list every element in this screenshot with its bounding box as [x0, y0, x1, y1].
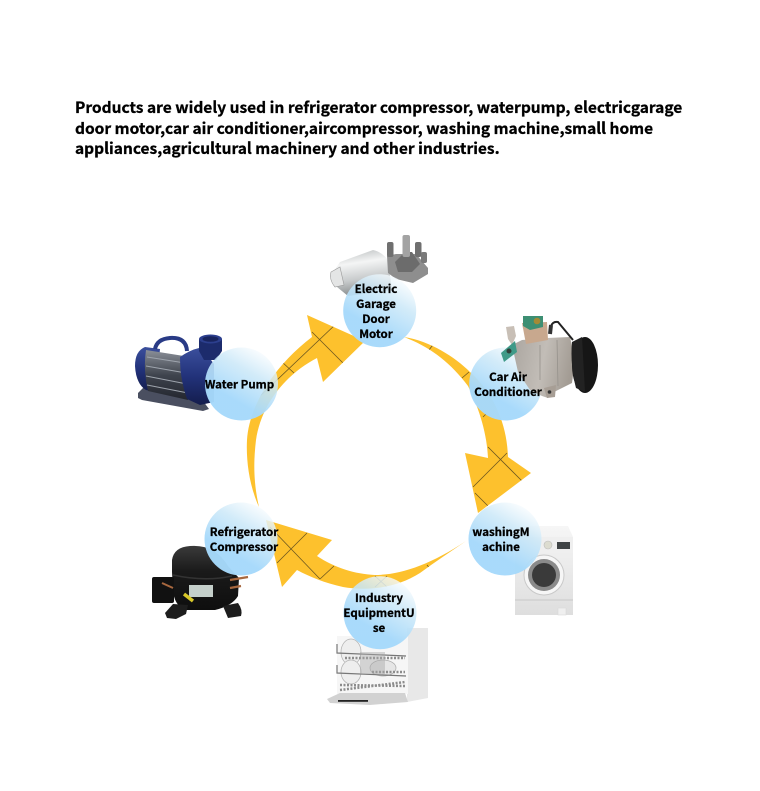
arrow: washing machine to refrigerator compressor — [266, 520, 466, 589]
node: industry equipment use — [343, 576, 416, 649]
node: industry equipment use: EquipmentU — [343, 605, 415, 621]
node: refrigerator compressor: Refrigerator — [210, 524, 279, 540]
icon: refrigerator compressor — [152, 546, 248, 619]
icon: washing machine — [515, 526, 573, 615]
node: refrigerator compressor: Compressor — [210, 539, 279, 555]
title: appliances,agricultural machinery and other industries. — [75, 137, 500, 159]
node: refrigerator compressor — [204, 502, 279, 576]
title: Products are widely used in refrigerator compressor, waterpump, electricgarage — [75, 96, 682, 118]
title — [75, 96, 682, 159]
node: industry equipment use: se — [373, 620, 386, 636]
icon: water pump — [135, 334, 222, 411]
node: washing machine: washingM — [472, 524, 530, 540]
icon: garage door motor — [330, 235, 428, 296]
node: car air conditioner: Conditioner — [474, 384, 543, 400]
node: electric garage door motor: Garage — [356, 296, 396, 312]
node: water pump — [205, 348, 278, 420]
node: car air conditioner — [469, 316, 598, 420]
node: car air conditioner: Car Air — [489, 369, 528, 385]
cycle diagram — [135, 235, 598, 705]
icon: car air conditioner compressor — [501, 316, 598, 398]
node: electric garage door motor: Door — [362, 311, 391, 327]
icon: dishwasher — [327, 628, 428, 705]
node: electric garage door motor: Electric — [355, 281, 397, 297]
node: washing machine — [468, 502, 542, 576]
arrow: garage door motor to washing machine — [404, 337, 531, 513]
title: door motor,car air conditioner,aircompressor, washing machine,small home — [75, 117, 653, 139]
node: industry equipment use: Industry — [355, 590, 403, 606]
node: washing machine: achine — [482, 539, 520, 555]
arrow: water pump to garage door motor — [247, 315, 365, 507]
node: electric garage door motor — [343, 274, 416, 347]
node: water pump: Water Pump — [205, 376, 274, 392]
node: electric garage door motor: Motor — [359, 326, 394, 342]
